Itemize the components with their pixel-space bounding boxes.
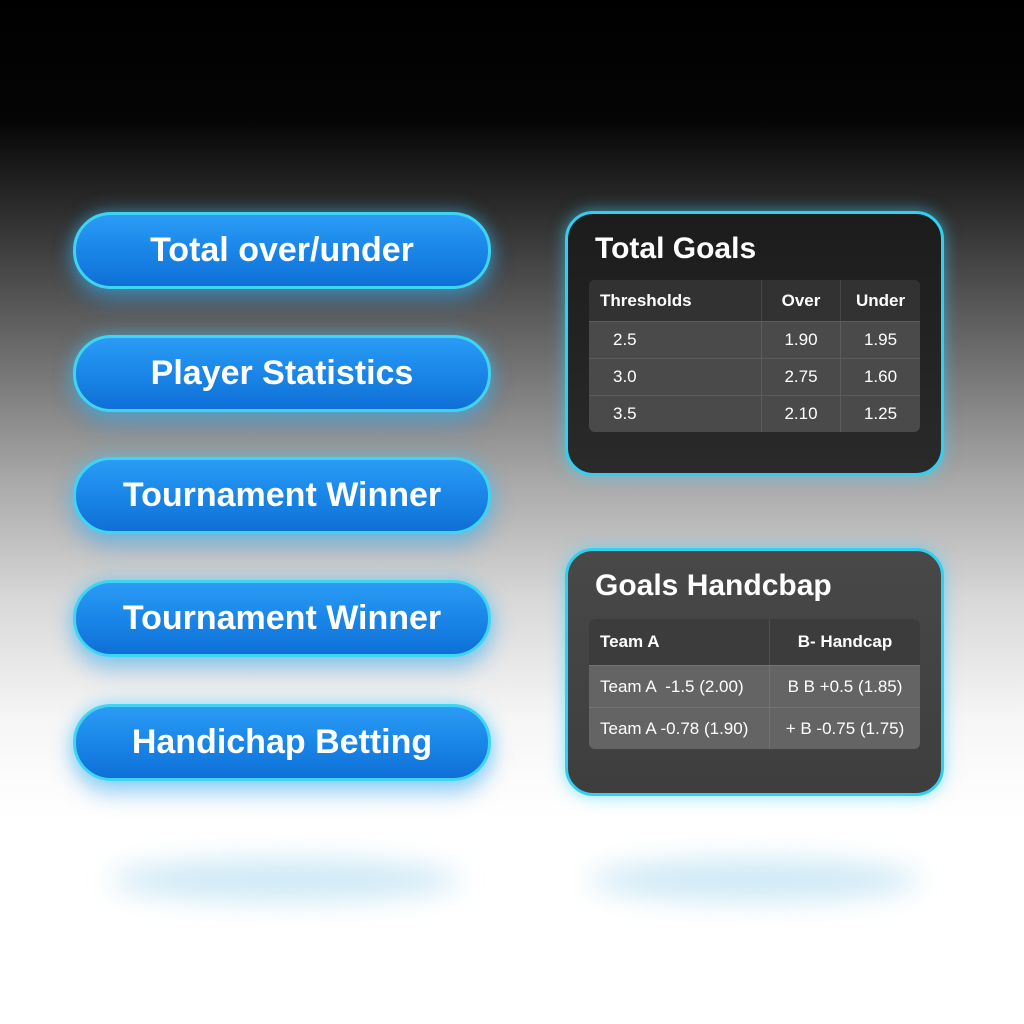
button: player statistics — [73, 335, 491, 412]
button: tournament winner 2 — [73, 580, 491, 657]
panel: goals handicap — [565, 548, 944, 796]
table: handicap: B B +0.5 (1.85) — [788, 676, 902, 696]
table: total goals: 2.10 — [784, 404, 818, 423]
table: total goals: Over — [782, 290, 820, 310]
button: player statistics: Player Statistics — [151, 354, 413, 392]
panel: total goals — [565, 211, 944, 476]
button: handicap betting: Handichap Betting — [132, 723, 432, 761]
table: handicap: Team A -0.78 (1.90) — [600, 718, 748, 738]
table: total goals: 2.5 — [613, 330, 637, 349]
button: handicap betting — [73, 704, 491, 781]
table: total goals: 3.5 — [613, 404, 637, 423]
panel title: total goals: Total Goals — [595, 232, 756, 265]
table: total goals: 1.95 — [864, 330, 897, 349]
button: tournament winner 2: Tournament Winner — [123, 599, 441, 637]
button: tournament winner: Tournament Winner — [123, 476, 441, 514]
table: total goals: Thresholds — [600, 290, 692, 310]
button: total over/under — [73, 212, 491, 289]
table: total goals: 1.25 — [864, 404, 897, 423]
table: total goals: 2.75 — [784, 367, 818, 386]
table: total goals: 3.0 — [613, 367, 637, 386]
table: handicap: Team A -1.5 (2.00) — [600, 676, 744, 696]
table: handicap: Team A — [600, 632, 660, 651]
shadow: right — [590, 860, 920, 900]
table: total goals: Under — [856, 290, 905, 310]
table: handicap: + B -0.75 (1.75) — [786, 718, 904, 738]
table: total goals: 1.90 — [784, 330, 818, 349]
table: handicap — [589, 619, 920, 749]
shadow: left — [110, 860, 460, 900]
table: total goals — [589, 280, 920, 432]
table: total goals: 1.60 — [864, 367, 897, 386]
button: total over/under: Total over/under — [150, 231, 414, 269]
button: tournament winner — [73, 457, 491, 534]
panel title: goals handicap: Goals Handcbap — [595, 569, 832, 602]
table: handicap: B- Handcap — [798, 632, 892, 651]
